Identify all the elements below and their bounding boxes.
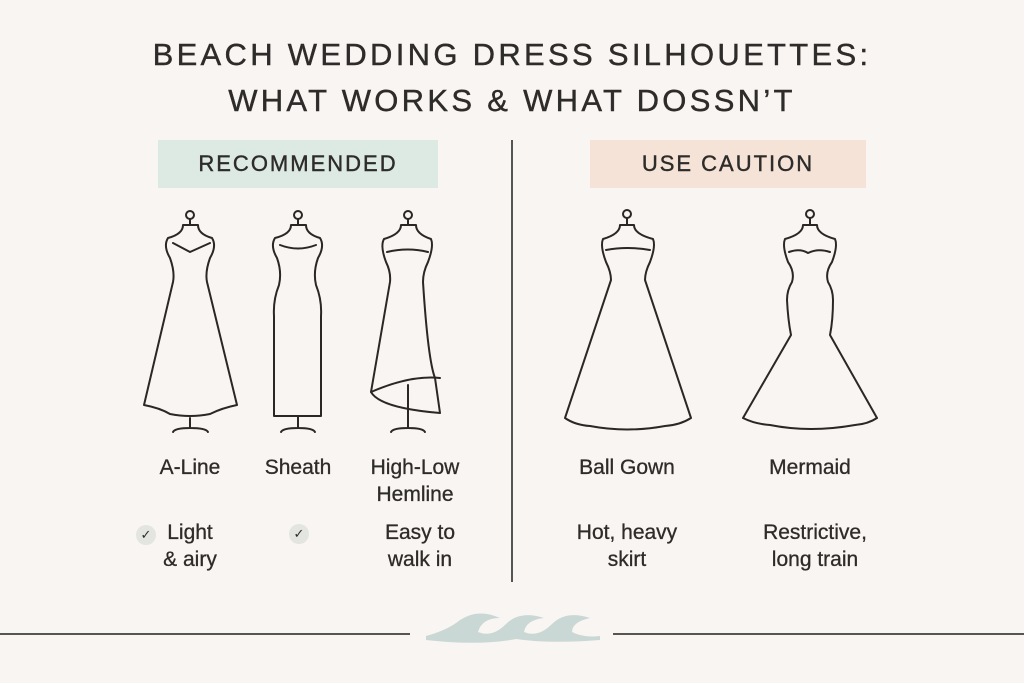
text: easy to walk in: walk in [388, 548, 452, 571]
footer line left [0, 633, 410, 634]
divider [511, 140, 512, 582]
label: Mermaid: Mermaid [769, 456, 851, 479]
text: easy to walk in: Easy to [385, 521, 455, 544]
label: A-Line: A-Line [160, 456, 220, 479]
label: High-Low Hemline: High-Low [371, 456, 459, 479]
icon: high-low dress [371, 211, 440, 432]
text: light & airy: Light [167, 521, 213, 544]
text: restrictive long train [763, 521, 867, 571]
label: Ball Gown: Ball Gown [579, 456, 675, 479]
badge: use caution: USE CAUTION [642, 151, 814, 176]
check icon 1: ✓ [141, 527, 151, 542]
text: light & airy: & airy [163, 548, 217, 571]
text: restrictive long train: Restrictive, [763, 521, 867, 544]
label: Sheath: Sheath [265, 456, 331, 479]
check icon 2 [289, 524, 309, 544]
text: hot heavy skirt: skirt [608, 548, 646, 571]
badge: recommended [158, 140, 438, 188]
footer line right [613, 633, 1024, 634]
icon: A-line dress [144, 211, 237, 432]
check icon 2: ✓ [294, 526, 304, 541]
icon: waves [426, 614, 600, 643]
text: hot heavy skirt [577, 521, 678, 571]
icon: mermaid [743, 210, 877, 429]
text: restrictive long train: long train [772, 548, 858, 571]
text: easy to walk in [385, 521, 455, 571]
badge: recommended: RECOMMENDED [198, 151, 398, 176]
check icon 1 [136, 525, 156, 545]
title: BEACH WEDDING DRESS SILHOUETTES: [153, 37, 871, 72]
title: WHAT WORKS & WHAT DOSSN’T [228, 83, 796, 118]
icon: sheath dress [273, 211, 322, 432]
label: High-Low Hemline [371, 456, 460, 506]
title [153, 37, 871, 118]
text: hot heavy skirt: Hot, heavy [577, 521, 677, 544]
text: light & airy [163, 521, 217, 571]
badge: use caution [590, 140, 866, 188]
icon: ball gown [565, 210, 691, 430]
label: High-Low Hemline: Hemline [376, 483, 454, 506]
